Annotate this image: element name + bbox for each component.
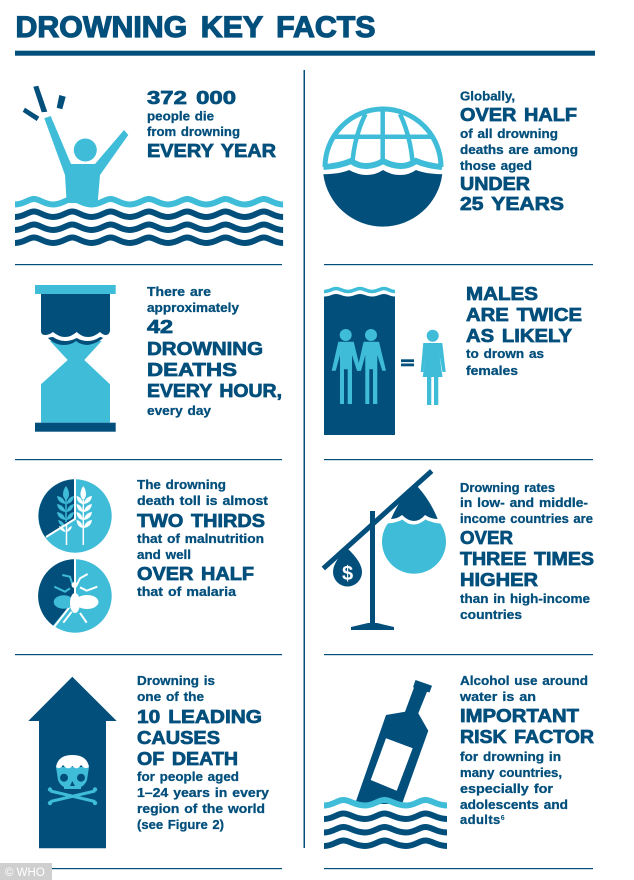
text: two thirds and over half: that of malaria <box>137 584 237 599</box>
icon: half-submerged globe <box>323 109 442 227</box>
panel: deaths per year <box>15 86 283 243</box>
text: two thirds and over half: TWO THIRDS <box>137 510 265 531</box>
text: two thirds and over half: death toll is almost <box>137 493 269 508</box>
text: over three times higher: Drowning rates <box>460 480 555 495</box>
icon: bottle in water <box>324 680 447 846</box>
text: 10 leading causes <box>137 673 270 832</box>
title: DROWNING KEY FACTS <box>16 11 376 44</box>
text: over three times higher: income countries are <box>460 511 593 526</box>
credit: WHO <box>0 863 52 880</box>
panel: leading causes of death <box>28 673 270 848</box>
text: over half under 25: those aged <box>460 158 532 173</box>
text: alcohol risk factor: 6 <box>501 815 505 822</box>
text: over three times higher: than in high-income <box>460 591 590 606</box>
text: 42 deaths every hour: DEATHS <box>147 359 237 380</box>
text: over three times higher: HIGHER <box>460 569 538 590</box>
text: males twice as likely: to drown as <box>466 346 544 361</box>
panel: alcohol <box>324 673 594 846</box>
icon: wheat pie <box>38 479 112 553</box>
text: over half under 25: UNDER <box>460 173 530 194</box>
text: 372 000 deaths <box>147 87 276 161</box>
text: over half under 25: deaths are among <box>460 142 578 157</box>
panel: income countries <box>323 471 594 630</box>
icon: balance scale with drops <box>323 471 450 630</box>
icon: two men equal one woman <box>324 288 446 435</box>
text: alcohol risk factor: IMPORTANT <box>460 705 580 726</box>
text: alcohol risk factor: many countries, <box>460 765 562 780</box>
panel: under 25 years <box>323 88 578 227</box>
text: males twice as likely <box>466 283 582 378</box>
text: 10 leading causes: 10 LEADING <box>137 706 262 727</box>
text: 10 leading causes: OF DEATH <box>137 748 238 769</box>
text: 42 deaths every hour: 42 <box>147 316 173 337</box>
text: 42 deaths every hour <box>147 284 282 418</box>
text: over three times higher: OVER <box>460 527 513 548</box>
text: two thirds and over half: and well <box>137 547 191 562</box>
text: 10 leading causes: for people aged <box>137 769 239 784</box>
text: 42 deaths every hour: EVERY HOUR, <box>147 380 282 401</box>
text: over half under 25: Globally, <box>460 88 515 104</box>
text: over half under 25: 25 YEARS <box>460 193 564 214</box>
icon: drowning person with waves <box>15 86 283 243</box>
text: alcohol risk factor: for drowning in <box>460 749 561 764</box>
text: two thirds and over half: OVER HALF <box>137 563 254 584</box>
panel: males twice as likely <box>324 283 582 435</box>
icon: arrow with skull <box>28 677 117 848</box>
text: over three times higher: THREE TIMES <box>460 548 594 569</box>
text: 10 leading causes: (see Figure 2) <box>137 817 224 832</box>
text: alcohol risk factor: especially for <box>460 781 553 796</box>
text: 372 000 deaths: from drowning <box>147 124 240 139</box>
text: 372 000 deaths: EVERY YEAR <box>147 140 276 161</box>
text: 10 leading causes: CAUSES <box>137 727 220 748</box>
text: alcohol risk factor: Alcohol use around <box>460 673 588 688</box>
text: 372 000 deaths: people die <box>147 108 214 124</box>
text: 10 leading causes: 1–24 years in every <box>137 785 270 800</box>
panel: deaths per hour <box>35 284 282 432</box>
text: over three times higher <box>460 480 594 622</box>
text: 42 deaths every hour: every day <box>147 403 212 418</box>
text: males twice as likely: females <box>466 363 518 378</box>
icon: balance scale with drops: $ <box>342 563 353 585</box>
text: 42 deaths every hour: There are <box>147 284 211 299</box>
text: 42 deaths every hour: approximately <box>147 300 240 315</box>
panel: malnutrition and malaria <box>38 477 269 633</box>
text: two thirds and over half <box>137 477 269 599</box>
text: over three times higher: in low- and middle- <box>460 495 588 510</box>
text: alcohol risk factor: RISK FACTOR <box>460 726 594 747</box>
text: two thirds and over half: that of malnutrition <box>137 531 264 546</box>
text: males twice as likely: ARE TWICE <box>466 304 582 325</box>
text: males twice as likely: MALES <box>466 283 538 304</box>
text: over three times higher: countries <box>460 607 522 622</box>
text: 10 leading causes: one of the <box>137 689 204 704</box>
text: 42 deaths every hour: DROWNING <box>147 338 263 359</box>
icon: mosquito pie <box>38 559 112 633</box>
text: males twice as likely: AS LIKELY <box>466 325 573 346</box>
text: two thirds and over half: The drowning <box>137 477 226 492</box>
text: alcohol risk factor <box>459 673 594 827</box>
text: alcohol risk factor: adolescents and <box>460 797 568 812</box>
text: 10 leading causes: region of the world <box>137 801 265 816</box>
credit: WHO: © WHO <box>5 867 45 879</box>
text: alcohol risk factor: adults <box>460 812 501 827</box>
text: over half under 25 <box>460 88 578 214</box>
text: 10 leading causes: Drowning is <box>137 673 215 688</box>
icon: hourglass <box>35 285 116 432</box>
text: over half under 25: of all drowning <box>460 126 558 141</box>
text: 372 000 deaths: 372 000 <box>147 87 236 108</box>
text: alcohol risk factor: water is an <box>459 689 536 704</box>
text: over half under 25: OVER HALF <box>460 104 577 125</box>
